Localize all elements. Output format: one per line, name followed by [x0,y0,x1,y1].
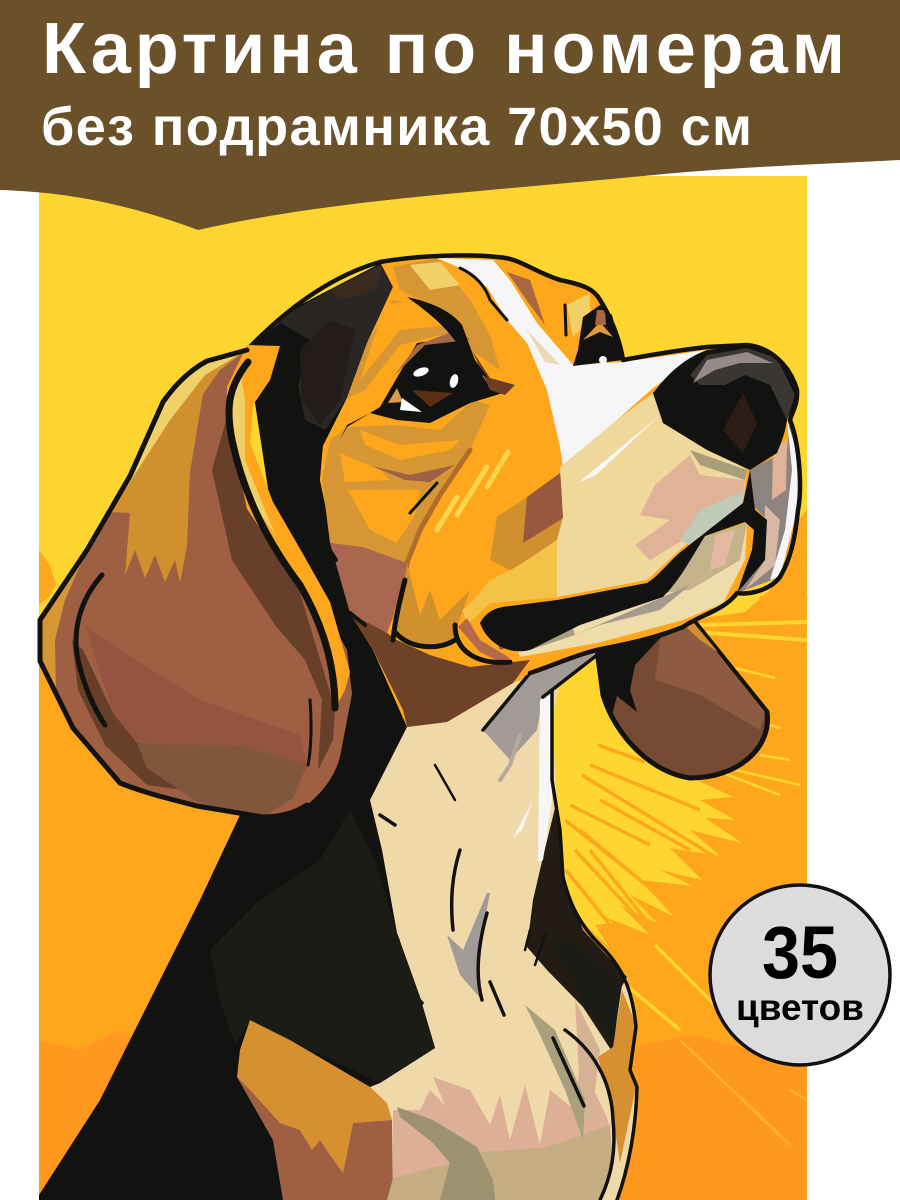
jaw dark brown [350,613,530,727]
brow orange, right [507,262,595,365]
neck: right dark fur [527,800,627,1053]
left eye [340,330,515,440]
eyebrow [407,297,488,378]
left ear [40,345,352,817]
badge: 35 colours: цветов [736,987,864,1028]
ear: lower dark band [72,640,213,794]
neck: grey strip [483,652,597,760]
ear: lower light brown [137,743,307,817]
mouth [480,470,767,651]
neck: ink lines [380,655,637,1200]
cheek ochre patch [490,473,565,570]
right ear [597,620,767,778]
badge: 35 colours: 35 [762,911,838,994]
face base [247,255,800,727]
painting background [39,176,807,1200]
badge: 35 colours [710,885,890,1065]
subtitle: без подрамника 70х50 см [41,97,752,157]
title: Картина по номерам [42,9,845,89]
ear: strip orange [227,345,350,709]
cheek brown [330,543,407,633]
neck and chest [237,650,637,1200]
head patch shading [275,263,393,430]
chest: pink fur [393,1060,610,1180]
sun rays: yellow fan [548,650,742,948]
right side streaks [620,555,807,1145]
dog illustration [39,255,800,1200]
lip and chin [458,618,510,662]
yellow highlights [437,452,508,530]
ear: ink lines [40,350,335,817]
wrinkle [372,465,455,482]
nose [653,345,797,470]
neck: grey fold [447,893,490,1000]
under-eye ochre [322,400,490,563]
chest: ochre patch [237,1020,392,1173]
white blaze [437,258,707,467]
chest: brown patch [237,1077,393,1200]
top banner [0,0,900,230]
neck: ochre right edge [598,990,637,1163]
ear: left rim [42,550,87,695]
forehead ochre [393,258,500,370]
right eye [573,305,623,366]
chest: grey-tan curve [397,1107,495,1200]
lower ochre [397,563,470,647]
chest: tan base [387,1125,613,1200]
ear: dark band [212,417,335,770]
ear: pale outer edge [112,350,247,510]
lower jaw [516,523,747,657]
ear: ochre upper [110,350,247,583]
muzzle pink blotches [635,455,745,560]
sun rays: orange streaks [565,745,720,925]
face ink lines [247,255,800,673]
muzzle cream [463,393,747,623]
body black [39,262,435,1200]
muzzle right side [737,420,800,593]
